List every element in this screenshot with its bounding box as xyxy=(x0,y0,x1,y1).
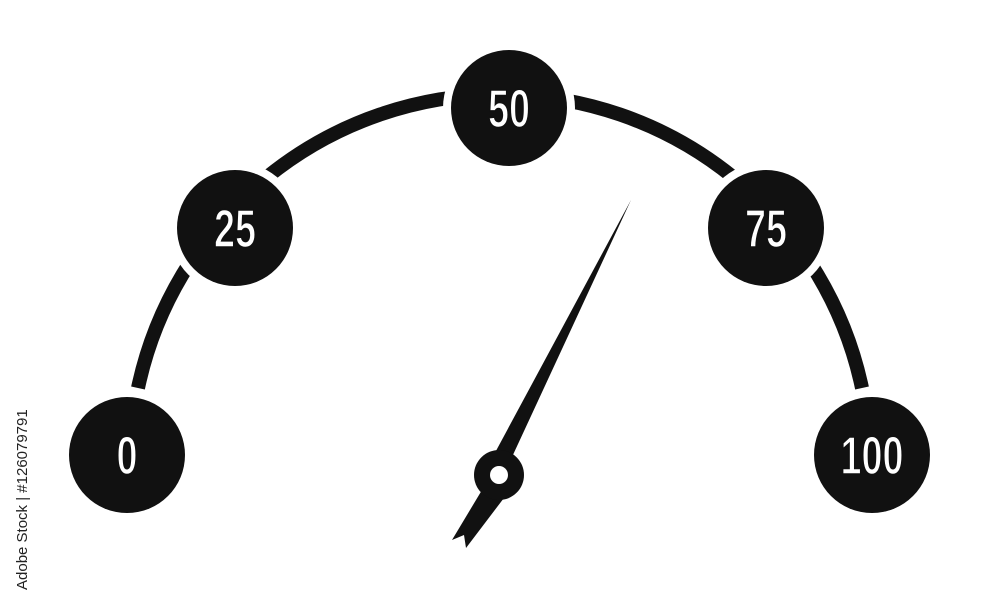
marker: 25: 25 xyxy=(214,198,256,259)
marker: 100 xyxy=(806,389,938,521)
marker: 25 xyxy=(169,162,301,294)
gauge arc xyxy=(138,95,862,388)
marker: 75 xyxy=(700,162,832,294)
marker: 100: 100 xyxy=(840,425,904,486)
marker: 0: 0 xyxy=(116,425,138,486)
marker: 75: 75 xyxy=(745,198,787,259)
marker: 50 xyxy=(443,42,575,174)
marker: 0 xyxy=(61,389,193,521)
watermark text: Adobe Stock | #126079791 xyxy=(14,409,31,590)
needle xyxy=(452,200,631,548)
marker: 50: 50 xyxy=(488,78,530,139)
